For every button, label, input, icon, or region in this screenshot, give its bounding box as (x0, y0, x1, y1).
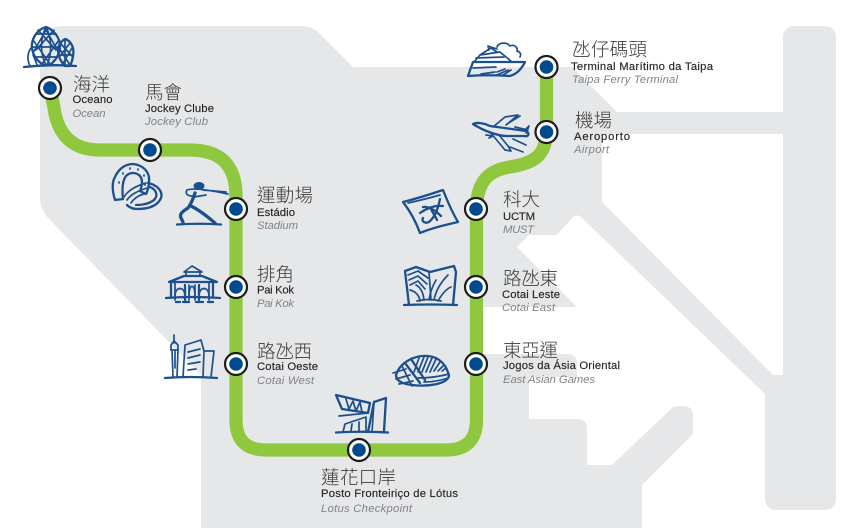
icon: airplane (473, 115, 529, 152)
station name: Cotai West (257, 375, 315, 387)
station name: 海洋 (73, 74, 110, 95)
stop marker (225, 276, 247, 298)
station name: 機場 (575, 110, 612, 131)
station: Jogos da Ásia Oriental (393, 340, 620, 386)
stop marker (225, 353, 247, 375)
station name: 運動場 (257, 185, 313, 206)
station name (571, 39, 714, 86)
station name: Stadium (257, 220, 298, 232)
station name: Taipa Ferry Terminal (572, 74, 678, 86)
stop marker (39, 77, 61, 99)
stop marker (536, 56, 558, 78)
icon: towers (165, 335, 217, 378)
station name (72, 74, 112, 120)
station name: Terminal Marítimo da Taipa (571, 61, 714, 73)
station name: Airport (573, 144, 610, 156)
station: Cotai Leste (404, 266, 560, 314)
icon: horseshoe (113, 164, 161, 209)
station name: 東亞運 (503, 340, 558, 361)
station name (503, 340, 620, 386)
stop marker (348, 439, 370, 461)
station name: Ocean (72, 108, 106, 120)
light rail line (50, 67, 546, 450)
station name: Cotai Leste (502, 289, 560, 301)
station name: 馬會 (145, 82, 182, 103)
station: Pai Kok (166, 264, 295, 310)
station name: Jockey Clube (145, 103, 214, 115)
icon: archer (177, 182, 228, 224)
stop marker (465, 353, 487, 375)
station name: UCTM (503, 211, 535, 223)
station name (573, 110, 630, 156)
station: UCTM (403, 189, 540, 236)
station name: East Asian Games (503, 374, 595, 386)
stop marker (465, 276, 487, 298)
icon: map with atom logo (403, 190, 458, 233)
station name: Posto Fronteiriço de Lótus (321, 488, 458, 500)
station name: Jockey Club (144, 116, 208, 128)
station name: Oceano (72, 94, 112, 106)
station name (257, 185, 313, 232)
station name: Pai Kok (257, 298, 295, 310)
icon: pavilion (166, 266, 220, 302)
station: Terminal Marítimo da Taipa (468, 39, 714, 86)
station name: Estádio (257, 207, 295, 219)
station name: 路氹西 (257, 341, 312, 362)
icon: twin domes (24, 27, 76, 67)
station: Aeroporto (473, 110, 630, 156)
station: Cotai Oeste (165, 335, 318, 387)
station: Oceano (24, 27, 112, 120)
station name: 科大 (503, 189, 540, 210)
stop marker (225, 198, 247, 220)
station name: 排角 (257, 264, 294, 285)
stop marker (536, 121, 558, 143)
station name: MUST (503, 224, 535, 236)
station name: Aeroporto (574, 131, 630, 143)
icon: ferry (468, 43, 525, 76)
station name: 路氹東 (503, 268, 558, 289)
station name: Lotus Checkpoint (321, 503, 413, 515)
station: Jockey Clube (113, 82, 214, 209)
stop marker (465, 198, 487, 220)
station name: 氹仔碼頭 (572, 39, 647, 60)
stop marker (139, 139, 161, 161)
station name (257, 264, 295, 310)
station name (321, 467, 458, 515)
station: Posto Fronteiriço de Lótus (321, 395, 458, 515)
station name (144, 82, 214, 128)
station name: 蓮花口岸 (321, 467, 396, 488)
station name: Cotai Oeste (257, 361, 318, 373)
icon: open-book building (404, 266, 457, 305)
station name (502, 268, 560, 314)
icon: checkpoint building (336, 395, 388, 432)
station: Estádio (177, 182, 313, 232)
station name: Jogos da Ásia Oriental (503, 359, 620, 372)
station name: Cotai East (502, 302, 556, 314)
station name (257, 341, 318, 387)
icon: dome arena (393, 356, 449, 386)
station name (503, 189, 540, 236)
station name: Pai Kok (257, 284, 294, 296)
